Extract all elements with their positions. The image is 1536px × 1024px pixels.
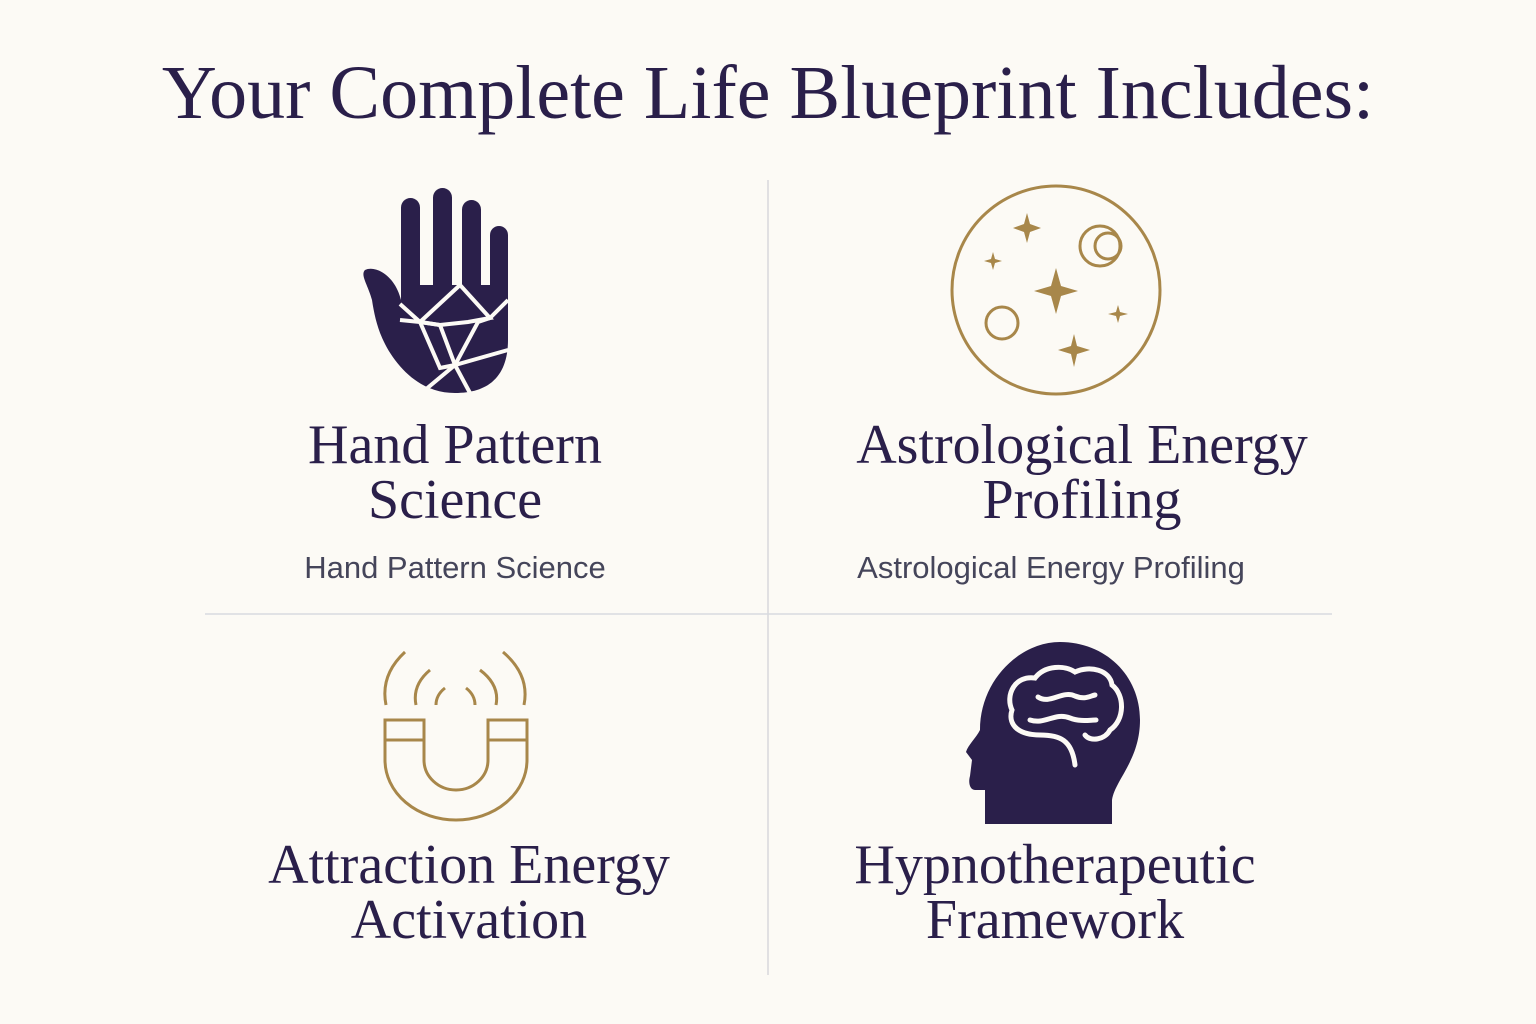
heading: hand: Hand Pattern bbox=[308, 414, 602, 476]
icon: magnet bbox=[385, 652, 527, 820]
heading: hypno bbox=[854, 834, 1256, 951]
heading: attraction: Activation bbox=[351, 889, 587, 951]
heading: astro bbox=[856, 414, 1308, 531]
subtitle: astro: Astrological Energy Profiling bbox=[857, 550, 1245, 585]
icon: head brain bbox=[966, 642, 1140, 824]
heading: astro: Astrological Energy bbox=[856, 414, 1308, 476]
heading: hand bbox=[308, 414, 602, 531]
heading: hypno: Framework bbox=[926, 889, 1184, 951]
icon: celestial circle bbox=[952, 186, 1160, 394]
heading: hypno: Hypnotherapeutic bbox=[854, 834, 1256, 896]
heading: astro: Profiling bbox=[982, 469, 1182, 531]
subtitle: hand: Hand Pattern Science bbox=[304, 550, 606, 585]
heading: attraction bbox=[268, 834, 670, 951]
heading: hand: Science bbox=[368, 469, 542, 531]
icon: hand bbox=[363, 188, 508, 393]
title: Your Complete Life Blueprint Includes: bbox=[162, 51, 1374, 135]
heading: attraction: Attraction Energy bbox=[268, 834, 670, 896]
